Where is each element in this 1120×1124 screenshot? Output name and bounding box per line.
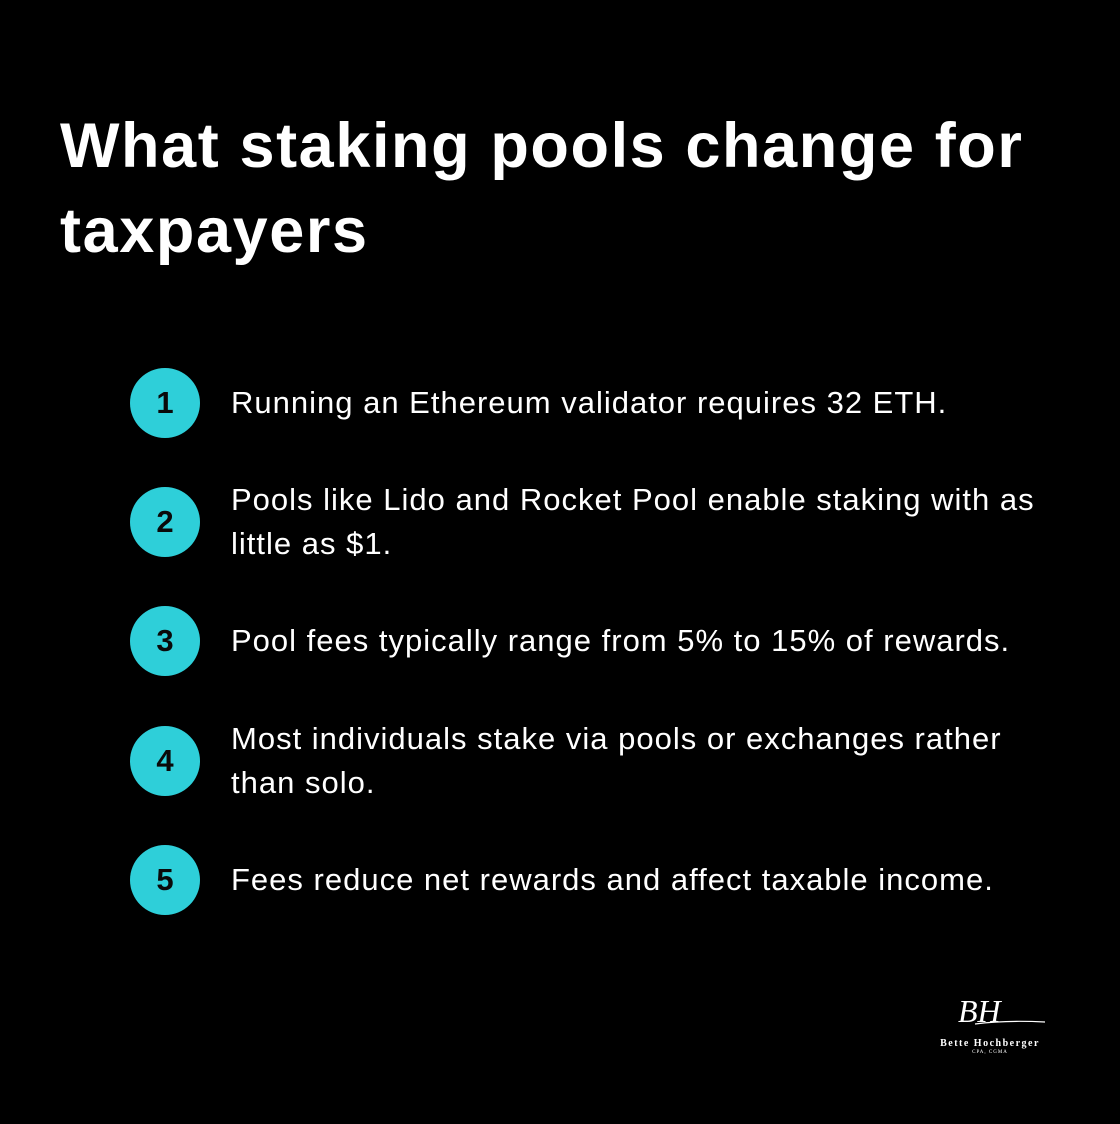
item 5	[130, 845, 994, 915]
item 2: 2	[156, 504, 174, 539]
logo: Bette Hochberger	[940, 1038, 1040, 1049]
item 4: Most individuals stake via pools or exchanges rather than solo.	[231, 721, 1002, 800]
item 3	[130, 606, 1010, 676]
item 4: 4	[156, 743, 174, 778]
logo: BH	[958, 993, 1003, 1029]
item 5: Fees reduce net rewards and affect taxable income.	[231, 862, 994, 897]
item 1: Running an Ethereum validator requires 32 ETH.	[231, 385, 947, 420]
item 1: 1	[156, 385, 174, 420]
item 1	[130, 368, 947, 438]
item 2: Pools like Lido and Rocket Pool enable staking with as little as $1.	[231, 482, 1035, 561]
item 3: Pool fees typically range from 5% to 15% of rewards.	[231, 623, 1010, 658]
logo	[940, 993, 1045, 1055]
logo: CPA, CGMA	[972, 1050, 1008, 1055]
title: What staking pools change for taxpayers	[60, 111, 1023, 266]
item 5: 5	[156, 862, 174, 897]
item 3: 3	[156, 623, 174, 658]
